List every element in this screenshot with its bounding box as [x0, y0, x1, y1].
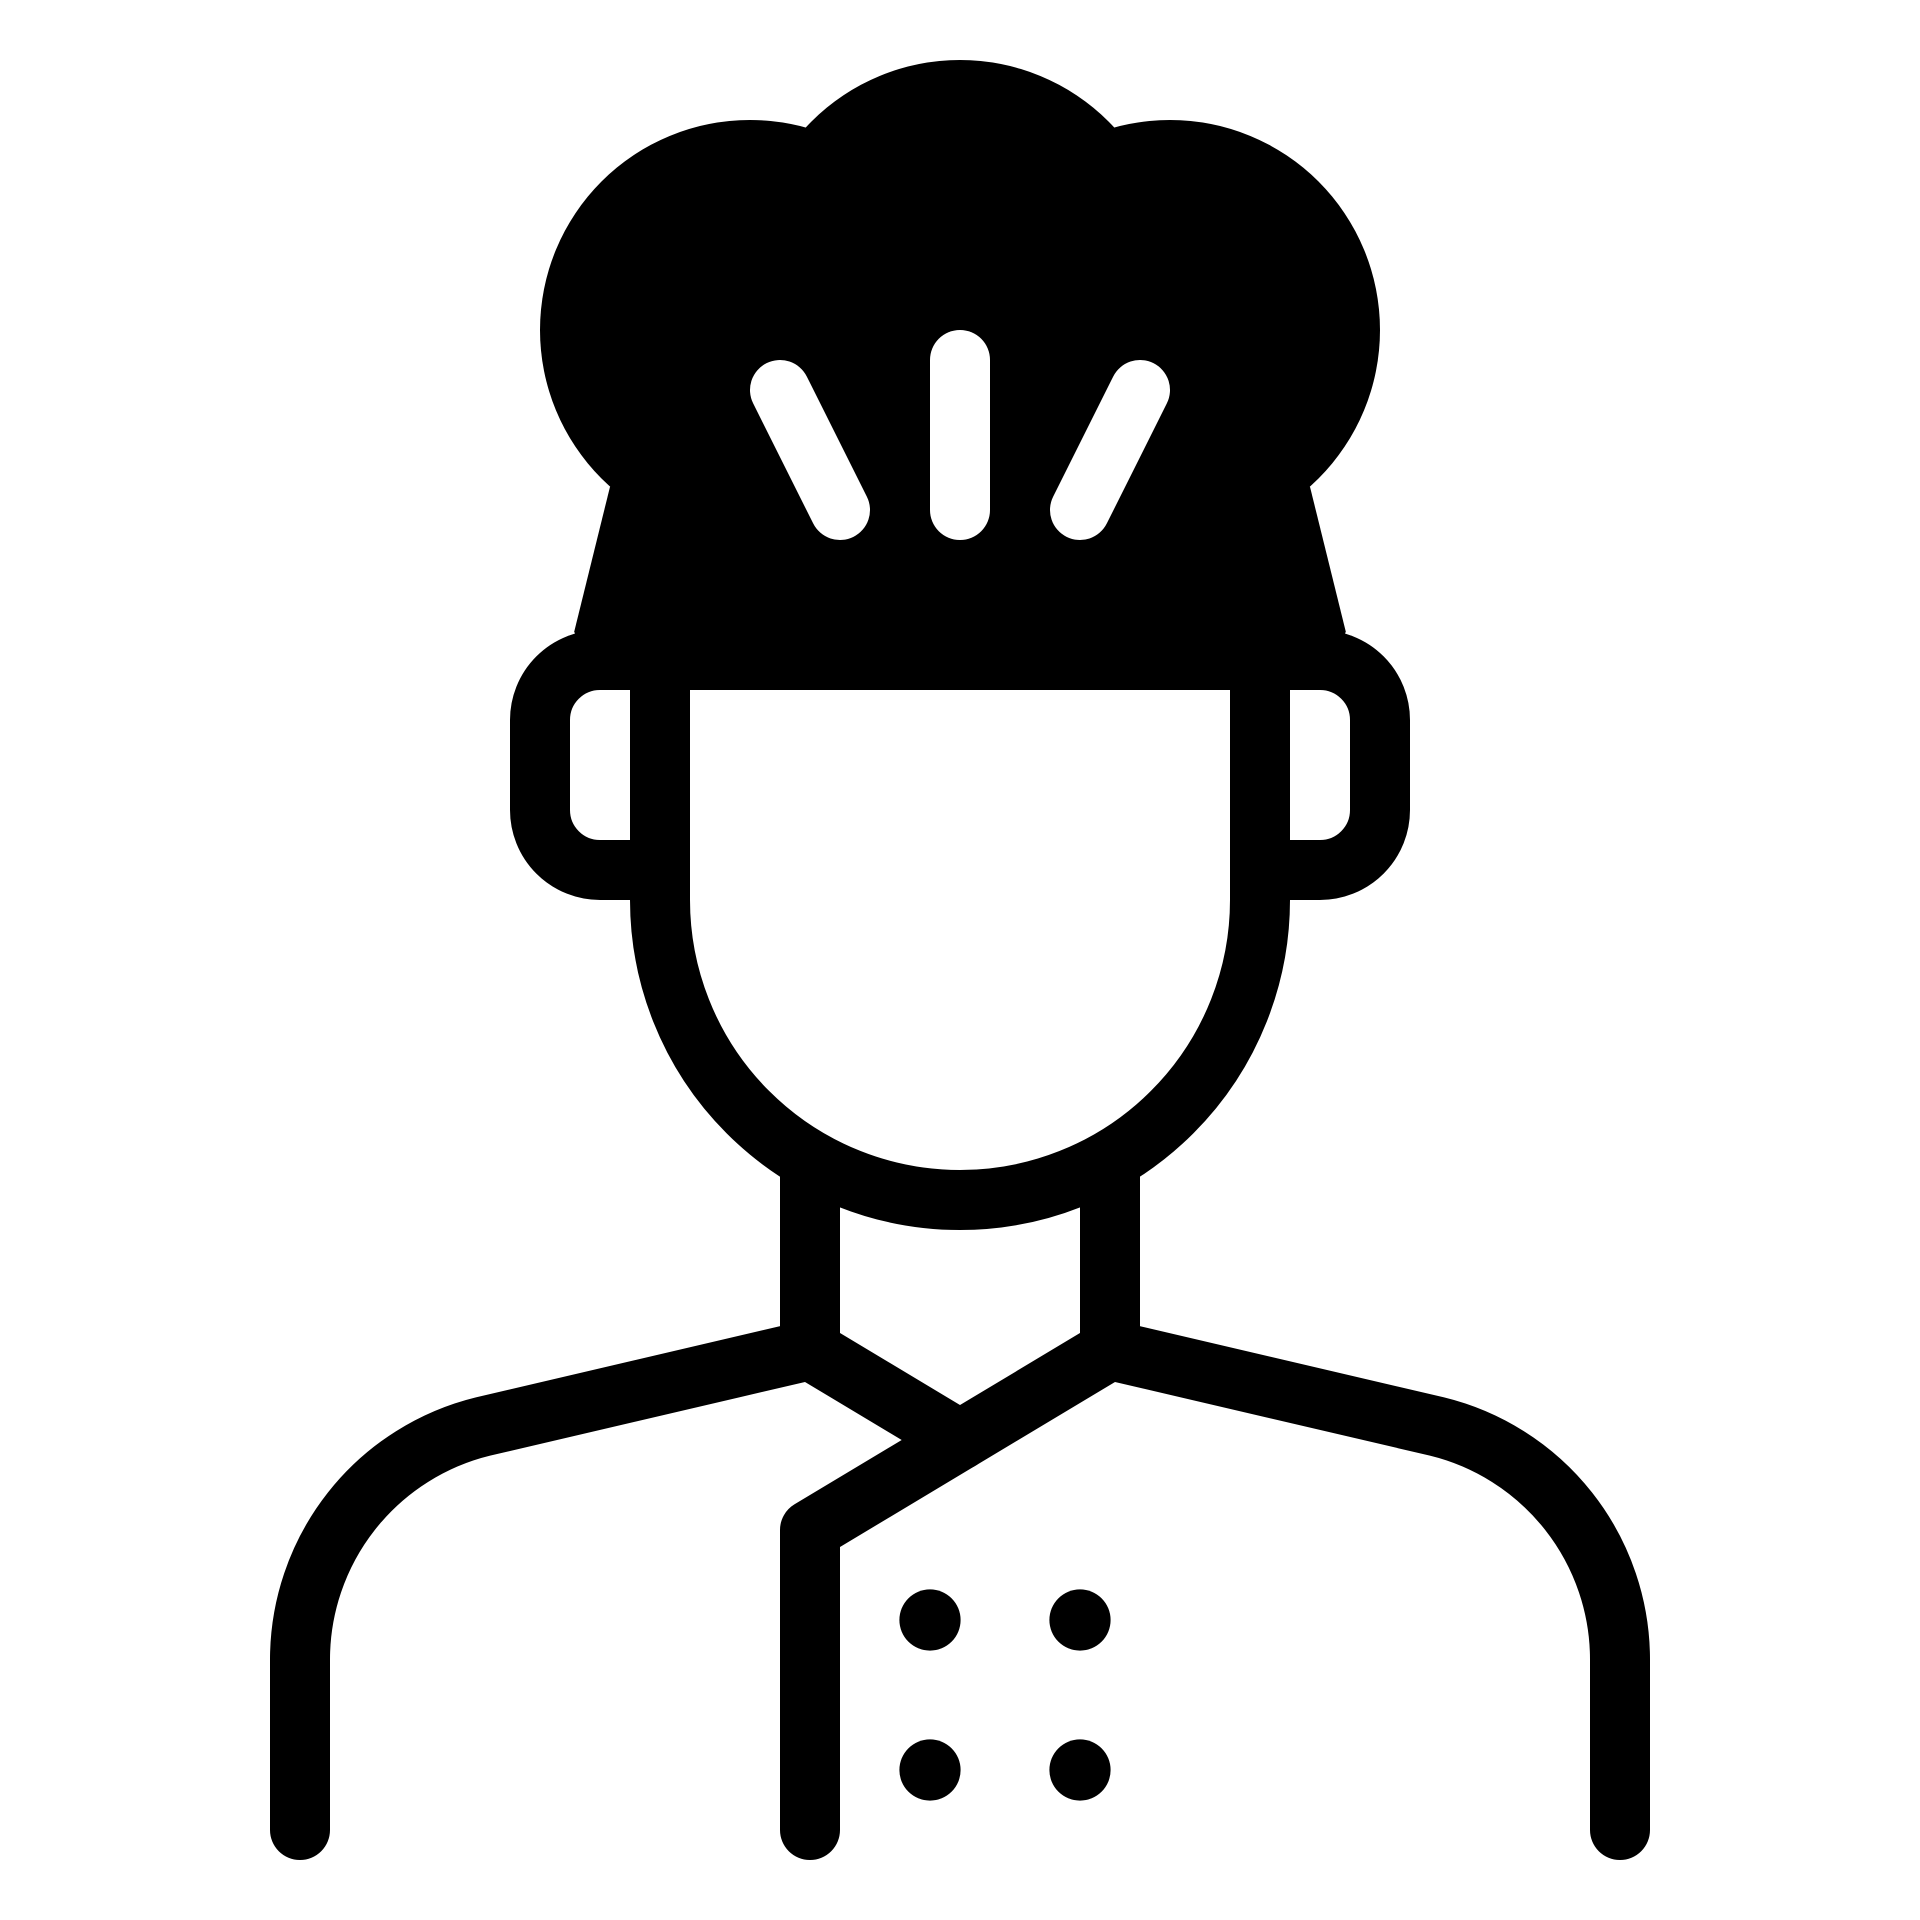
chef hat: [540, 60, 1380, 690]
jacket buttons: [899, 1589, 1111, 1801]
left shoulder: [300, 1350, 810, 1830]
right shoulder: [1110, 1350, 1620, 1830]
head, ears and torso outline: [300, 660, 1620, 1830]
head: [660, 660, 1260, 1200]
neck: [810, 1170, 1110, 1350]
right ear: [1260, 660, 1380, 870]
hat pleats: [780, 360, 1140, 510]
hat puffs and body: [540, 60, 1380, 690]
collar and jacket front: [810, 1350, 1110, 1830]
left ear: [540, 660, 660, 870]
collar left flap: [810, 1350, 960, 1440]
